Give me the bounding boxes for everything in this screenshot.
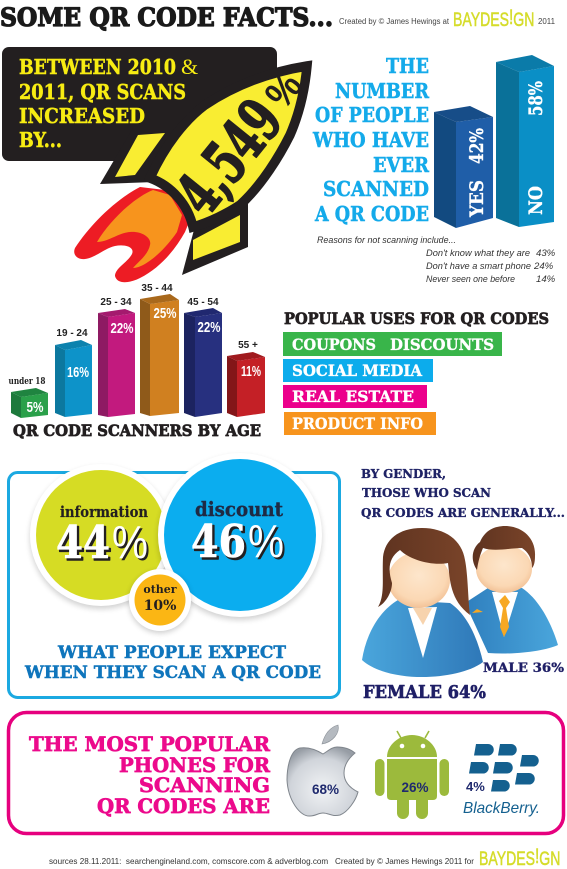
bar: 45-54: [184, 297, 222, 417]
icon: rocket flames: [74, 187, 192, 282]
bar: 35-44: 35 - 44: [141, 283, 173, 294]
text: reasons for not scanning: Reasons for not scanning include...: [317, 235, 456, 246]
bar: under 18: 5%: [26, 399, 44, 416]
text: scans headline: BY...: [19, 128, 62, 152]
icon: blackberry 4%: BlackBerry.: [463, 800, 540, 817]
text: reasons for not scanning: Don't have a smart phone: [426, 261, 531, 272]
bar: 35-44: [140, 283, 179, 416]
text: reasons for not scanning: 43%: [536, 248, 556, 259]
text: scans headline: 2011, QR SCANS: [19, 80, 186, 104]
logo: baydesign footer: !: [535, 844, 539, 868]
icon: android 26%: [375, 731, 449, 819]
heading: popular uses: POPULAR USES FOR QR CODES: [284, 309, 549, 328]
panel: popular phones: [8, 712, 564, 834]
circle: information: information: [60, 503, 148, 521]
heading: what people expect: WHEN THEY SCAN A QR CODE: [24, 663, 321, 683]
bar: 35-44: 25%: [154, 305, 176, 322]
bar: 25-34: 25 - 34: [100, 297, 132, 308]
bar chart: scanners by age: [8, 283, 265, 418]
use: coupons discounts: [283, 332, 502, 356]
text: by gender: BY GENDER,: [361, 467, 446, 481]
text: scans headline: BETWEEN 2010: [19, 55, 176, 79]
heading: popular phones: [29, 732, 270, 818]
bar: 19-24: [55, 328, 92, 417]
use: product info: PRODUCT INFO: [292, 414, 423, 433]
bar: 55+: 11%: [241, 363, 261, 380]
text: number of people heading: EVER: [373, 153, 430, 177]
bar chart: have scanned: [434, 55, 554, 228]
bar: yes 42%: YES: [466, 180, 488, 218]
use: coupons discounts: COUPONS: [292, 335, 376, 354]
circle: information: %: [114, 518, 150, 570]
rocket figure: 4,549%: %: [257, 64, 311, 117]
label: male 36%: MALE 36%: [483, 661, 565, 676]
text: reasons for not scanning: [317, 235, 556, 285]
heading: what people expect: WHAT PEOPLE EXPECT: [57, 643, 286, 663]
circle: discount: discount: [195, 497, 284, 521]
use: real estate: REAL ESTATE: [292, 387, 414, 406]
heading: what people expect: [24, 643, 321, 683]
heading: scanners by age: QR CODE SCANNERS BY AGE: [13, 421, 261, 440]
text: number of people heading: SCANNED: [323, 177, 429, 201]
use: coupons discounts: DISCOUNTS: [390, 335, 494, 354]
text: number of people heading: THE: [386, 54, 429, 78]
circle: other: 10%: [144, 598, 176, 614]
text: reasons for not scanning: Don't know what they are: [426, 248, 530, 259]
use: social media: SOCIAL MEDIA: [292, 361, 423, 380]
text: number of people heading: NUMBER: [335, 79, 430, 103]
heading: popular phones: QR CODES ARE: [97, 794, 270, 818]
bar: 25-34: [98, 297, 135, 417]
panel: what people expect: [8, 453, 340, 698]
list: popular uses: [283, 332, 502, 435]
rocket figure: 4,549%: 4,549: [163, 86, 297, 228]
icon: blackberry 4%: [463, 744, 540, 817]
circle: other: other: [143, 583, 177, 596]
bar: under 18: [8, 377, 48, 418]
circle: discount: %: [250, 517, 286, 569]
icon: rocket body: [100, 66, 307, 275]
circle: discount: %: [248, 515, 284, 567]
circle: information: 44: [56, 516, 110, 569]
text: number of people heading: OF PEOPLE: [315, 103, 429, 127]
circle: information: 44: [58, 518, 112, 571]
icon: apple 68%: 68%: [312, 782, 339, 797]
heading: popular phones: PHONES FOR: [119, 753, 270, 777]
panel: scans callout box: [2, 47, 277, 161]
circle: discount: 46: [191, 515, 246, 568]
use: real estate: [283, 385, 427, 408]
footer: sources: sources 28.11.2011: searchengineland.com, comscore.com & adverblog.com Created by © James Hewings 2011 for: [49, 856, 474, 866]
heading: popular phones: THE MOST POPULAR: [29, 732, 270, 756]
circle: information: [30, 464, 172, 609]
title: SOME QR CODE FACTS...: [0, 3, 333, 32]
rocket upper fin: [100, 128, 178, 184]
bar: under 18: under 18: [8, 377, 46, 387]
circle: information: %: [112, 516, 148, 568]
bar: yes 42%: [434, 106, 493, 228]
label: female 64%: FEMALE 64%: [363, 682, 486, 703]
bar: 19-24: 19 - 24: [56, 328, 88, 339]
bar: yes 42%: 42%: [466, 128, 488, 164]
bar: 19-24: 16%: [67, 364, 89, 381]
rocket lower fin: [182, 203, 248, 275]
bar: no 58%: NO: [525, 186, 547, 215]
icon: apple 68%: [287, 725, 358, 816]
circle: discount: 46: [193, 517, 248, 570]
text: by gender: THOSE WHO SCAN: [362, 486, 491, 500]
bar: no 58%: [496, 55, 554, 227]
credit year: 2011: [538, 17, 556, 26]
credit line: Created by © James Hewings at: [339, 17, 450, 26]
circle: discount: [158, 453, 322, 620]
bar: 45-54: 22%: [198, 319, 220, 336]
logo: baydesign header: BAYDES: [453, 9, 509, 31]
heading: popular phones: SCANNING: [139, 773, 270, 797]
rocket hull: [150, 66, 307, 227]
text: by gender: QR CODES ARE GENERALLY...: [361, 506, 565, 520]
logo: baydesign header: GN: [513, 9, 534, 31]
text: number of people heading: A QR CODE: [314, 202, 429, 226]
icon: blackberry 4%: 4%: [466, 779, 485, 794]
bar: 55+: [227, 340, 265, 417]
text: scans headline: INCREASED: [19, 104, 145, 128]
icon: male figure: [465, 526, 558, 654]
text: number of people heading: WHO HAVE: [312, 128, 429, 152]
logo: baydesign header: !: [509, 5, 513, 29]
logo: baydesign footer: BAYDES: [479, 848, 535, 869]
text: scans headline: [19, 54, 198, 152]
text: number of people heading: [312, 54, 430, 226]
icon: android 26%: 26%: [401, 780, 429, 795]
bar: no 58%: 58%: [525, 81, 547, 116]
bar: 45-54: 45 - 54: [187, 297, 219, 308]
text: by gender: [361, 467, 565, 520]
bar: 25-34: 22%: [110, 320, 134, 337]
text: reasons for not scanning: 24%: [533, 261, 554, 272]
text: reasons for not scanning: 14%: [536, 274, 556, 285]
bar: 55+: 55 +: [238, 340, 258, 351]
logo: baydesign footer: GN: [539, 848, 560, 869]
text: reasons for not scanning: Never seen one before: [426, 274, 515, 285]
circle: other: [129, 569, 191, 633]
icon: female figure: [362, 528, 483, 677]
text: scans headline: &: [181, 54, 198, 79]
